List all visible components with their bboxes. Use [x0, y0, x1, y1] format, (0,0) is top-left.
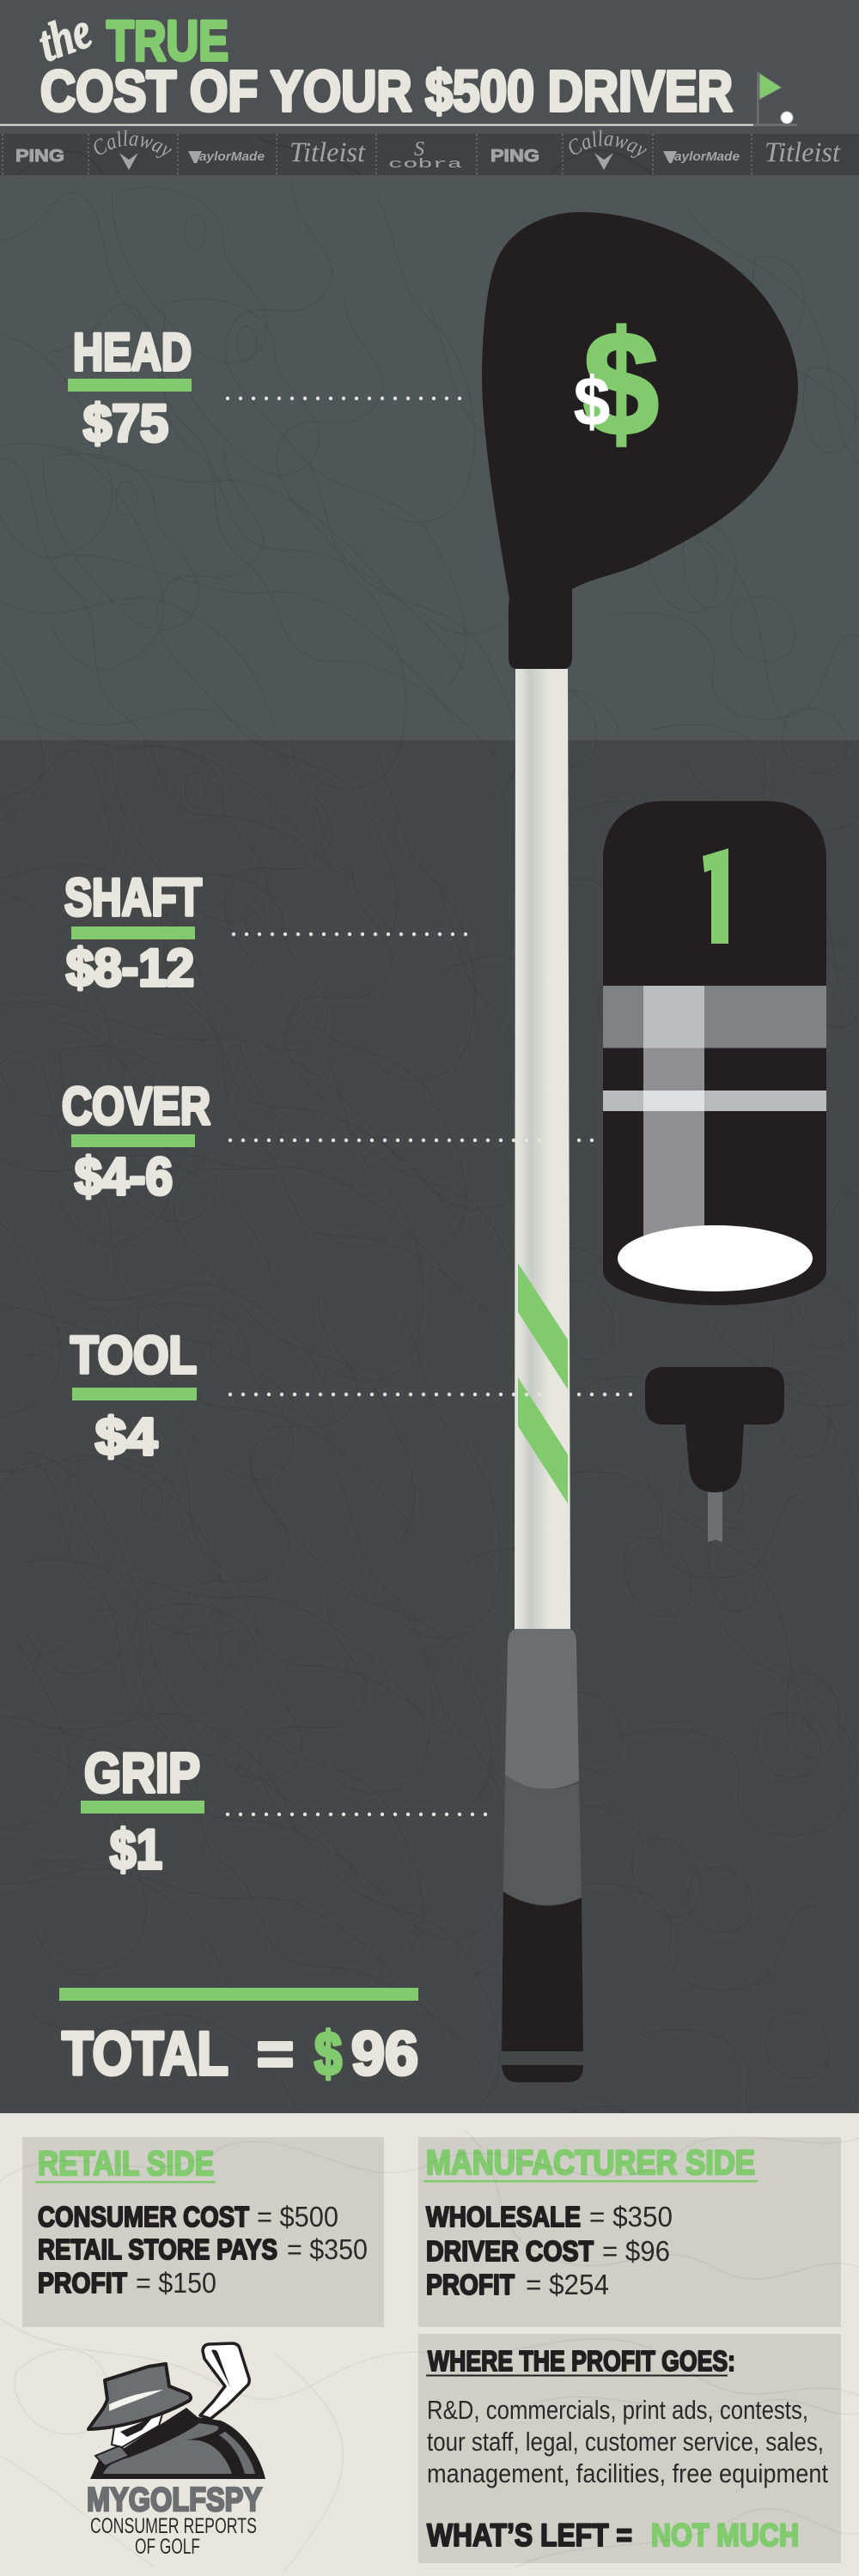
logo: PING: PING	[15, 147, 64, 166]
brand logo strip	[0, 131, 859, 175]
tool pin	[708, 1491, 722, 1542]
logo: Callaway repeat	[569, 131, 647, 170]
mascot golf club	[200, 2343, 249, 2419]
panel: manufacturer side	[418, 2137, 841, 2327]
manufacturer lines: = $96	[602, 2235, 670, 2267]
mascot coat	[90, 2408, 265, 2479]
cover cost label: COVER	[62, 1077, 210, 1135]
wrench tool illustration	[645, 1367, 784, 1542]
shaft cost label: SHAFT	[64, 868, 202, 927]
total: $	[314, 2020, 342, 2088]
logo: Callaway: Callaway	[94, 131, 172, 158]
total: 96	[351, 2020, 418, 2088]
tool handle	[645, 1367, 784, 1492]
manufacturer lines: PROFIT	[426, 2269, 515, 2300]
manufacturer lines: = $254	[526, 2269, 609, 2300]
retail lines: = $350	[287, 2233, 368, 2265]
retail lines: PROFIT	[38, 2267, 127, 2299]
cover opening	[618, 1225, 813, 1291]
logo: MyGolfSpy: OF GOLF	[135, 2535, 200, 2559]
cover tartan bands	[603, 986, 826, 1254]
logo: Callaway repeat: Callaway	[569, 131, 647, 158]
shaft cost label	[64, 868, 202, 997]
title word TRUE: TRUE	[107, 9, 228, 72]
total	[59, 1988, 418, 2088]
retail lines: RETAIL STORE PAYS	[38, 2233, 277, 2265]
mascot face	[112, 2411, 163, 2447]
cover cost label	[62, 1077, 210, 1206]
head cost label: HEAD	[73, 323, 192, 381]
head cost label: $75	[83, 394, 168, 453]
head cost label	[68, 323, 192, 453]
manufacturer lines: WHOLESALE	[426, 2201, 581, 2233]
logo: cobra: cobra	[388, 157, 462, 172]
panel: retail side	[22, 2137, 384, 2327]
retail lines: = $150	[136, 2267, 216, 2299]
logo: TaylorMade repeat: aylorMade	[674, 149, 740, 164]
retail lines: = $500	[257, 2201, 338, 2233]
total: =	[257, 2020, 294, 2088]
header rule	[0, 124, 756, 125]
club grip	[502, 1629, 583, 2082]
profit heading: WHERE THE PROFIT GOES:	[428, 2345, 735, 2377]
cover dotted leader	[230, 1139, 593, 1142]
logo: cobra	[388, 138, 462, 172]
club head	[482, 212, 798, 669]
what's left line: WHAT’S LEFT =	[427, 2518, 632, 2553]
logo tagline: CONSUMER REPORTS	[90, 2514, 257, 2538]
shaft green stripes	[518, 1263, 568, 1504]
tool dotted leader	[230, 1393, 631, 1396]
head dotted leader	[228, 397, 461, 400]
manufacturer lines: DRIVER COST	[426, 2235, 594, 2267]
grip dotted leader	[228, 1813, 488, 1816]
grip end cap	[502, 2065, 583, 2082]
shaft dotted leader	[234, 933, 467, 936]
icon: green dollar: $	[583, 301, 659, 466]
manufacturer heading: MANUFACTURER SIDE	[426, 2144, 755, 2182]
retail lines	[38, 2201, 368, 2299]
tool cost label: $4	[95, 1407, 157, 1466]
title line: COST OF YOUR $500 DRIVER	[40, 59, 733, 124]
logo wordmark: MYGOLFSPY	[87, 2482, 262, 2518]
retail lines: CONSUMER COST	[38, 2201, 249, 2233]
tool cost label: TOOL	[70, 1326, 197, 1384]
manufacturer lines: = $350	[589, 2201, 673, 2233]
cover number	[703, 848, 728, 944]
icon: white dollar: $	[574, 363, 610, 440]
icon: golf flag and ball	[753, 72, 797, 126]
logo: Callaway	[94, 131, 172, 170]
total: TOTAL	[62, 2020, 228, 2088]
club shaft	[515, 669, 570, 1630]
logo: Titleist repeat: Titleist	[765, 137, 841, 168]
logo: Titleist: Titleist	[289, 137, 366, 168]
grip cost label: $1	[110, 1818, 162, 1880]
what's left line: NOT MUCH	[651, 2518, 799, 2553]
panel: where the profit goes	[418, 2334, 841, 2563]
logo: MyGolfSpy	[87, 2343, 265, 2559]
tool cost label	[70, 1326, 197, 1466]
logo: cobra: S	[414, 138, 424, 161]
logo: TaylorMade: aylorMade	[199, 149, 265, 164]
what's left line	[427, 2518, 799, 2553]
manufacturer lines	[426, 2201, 673, 2300]
header	[0, 2, 797, 126]
profit body text	[427, 2395, 828, 2488]
shaft cost label: $8-12	[66, 939, 194, 997]
cover cost label: $4-6	[75, 1147, 173, 1206]
headcover illustration	[603, 801, 826, 1305]
mascot hat	[88, 2364, 191, 2429]
grip cost label	[81, 1741, 204, 1880]
spy mascot	[88, 2343, 265, 2479]
grip cost label: GRIP	[84, 1741, 200, 1804]
retail heading: RETAIL SIDE	[38, 2145, 214, 2183]
logo: PING repeat: PING	[490, 147, 539, 166]
